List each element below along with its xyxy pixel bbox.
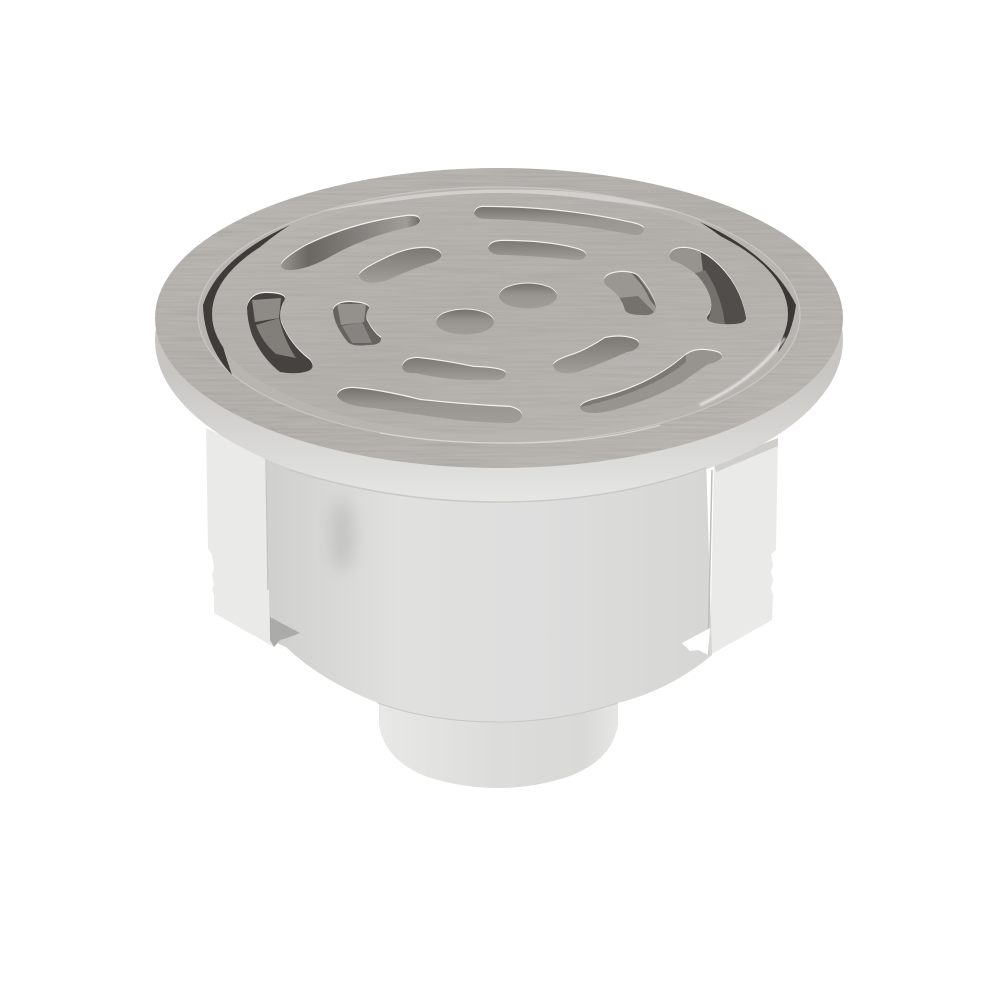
cylindrical body: [266, 455, 712, 722]
slot: inner left: [333, 301, 381, 346]
brushed texture: [155, 168, 843, 468]
slot: outer bottom-right: [580, 349, 722, 413]
ring highlights: [700, 338, 785, 405]
grate slots: [247, 206, 746, 423]
slot: inner bottom: [402, 357, 506, 380]
flange top face: [155, 168, 843, 468]
slot: inner right: [604, 270, 656, 316]
inner ring: [198, 187, 800, 443]
groove dark right: [700, 222, 796, 352]
right notch triangle: [682, 628, 710, 655]
hole: centre right: [499, 282, 557, 308]
slot: outer bottom: [337, 387, 522, 423]
outlet pipe: [379, 690, 618, 788]
round flange: [155, 168, 843, 502]
slot: inner bottom-right: [553, 335, 639, 373]
groove dark left: [203, 225, 290, 375]
collar line: [290, 468, 706, 502]
slot: inner top-left: [359, 247, 441, 283]
left notch triangle: [270, 617, 300, 647]
product illustration: round floor drain: [155, 168, 843, 788]
slot: inner top: [488, 240, 586, 260]
hole: centre left: [436, 308, 494, 334]
slot: outer top: [474, 206, 644, 235]
groove top light: [320, 189, 680, 212]
slot: outer top-left: [281, 215, 420, 270]
flange side wall: [155, 178, 843, 502]
right white clip: [710, 438, 778, 655]
slotted grate: [212, 193, 788, 435]
slot: outer right: [665, 245, 746, 325]
left white clip: [206, 428, 274, 647]
grate brushed texture: [212, 193, 788, 435]
slot: outer left: [247, 292, 313, 373]
